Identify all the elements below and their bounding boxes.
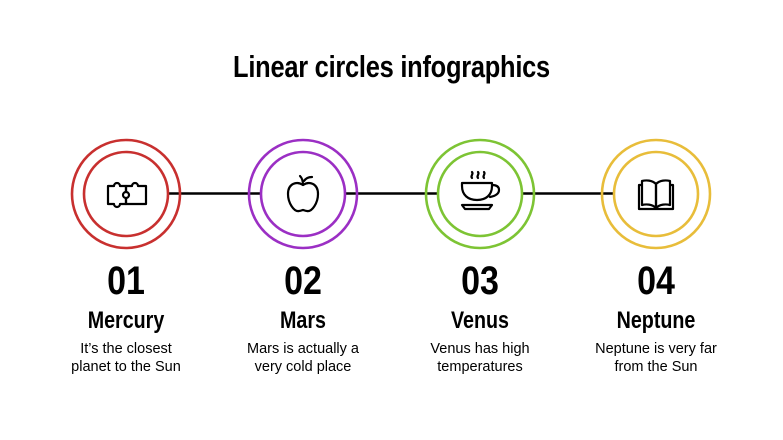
item: Neptune: from the Sun: [614, 359, 698, 375]
icon: apple: [288, 176, 318, 211]
item: Neptune: 04: [637, 259, 675, 303]
icon: coffee cup: [462, 172, 499, 209]
item: Venus: [430, 259, 530, 375]
item: Mercury: 01: [107, 259, 145, 303]
circle: Neptune: [602, 140, 710, 248]
item: Mercury: It’s the closest: [80, 341, 172, 357]
circle: Mars: [249, 140, 357, 248]
circle: Mercury: [72, 140, 180, 248]
item: Venus: Venus has high: [430, 341, 530, 357]
item: Mars: Mars is actually a: [247, 341, 359, 357]
icon: open book: [639, 180, 673, 209]
item: Mars: 02: [284, 259, 322, 303]
icon: puzzle: [108, 183, 146, 207]
item: Venus: 03: [461, 259, 499, 303]
circle: Venus: [426, 140, 534, 248]
item: Mercury: planet to the Sun: [71, 359, 181, 375]
item: Neptune: Neptune is very far: [595, 341, 717, 357]
item: Mars: Mars: [280, 307, 326, 334]
item: Mercury: [71, 259, 181, 375]
item: Mercury: Mercury: [88, 307, 164, 334]
title: Linear circles infographics: [233, 49, 550, 84]
connector line: [126, 192, 656, 195]
item: Venus: temperatures: [437, 359, 523, 375]
item: Venus: Venus: [451, 307, 509, 334]
item: Neptune: Neptune: [617, 307, 695, 334]
item: Neptune: [595, 259, 717, 375]
item: Mars: very cold place: [255, 359, 351, 375]
item: Mars: [247, 259, 359, 375]
